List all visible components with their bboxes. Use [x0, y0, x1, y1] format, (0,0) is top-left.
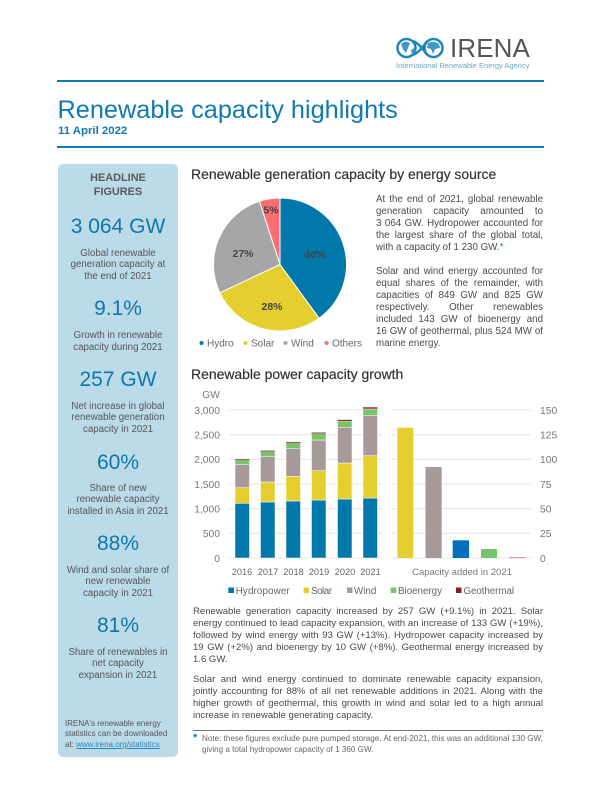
panel heading: FIGURES: [94, 186, 142, 198]
right axis labels: 50: [540, 504, 552, 516]
figure description: Share of new: [89, 483, 147, 494]
grid lines: [229, 410, 531, 558]
left axis labels: 2,500: [194, 430, 220, 442]
text block: generation capacity: [376, 194, 543, 349]
footnote text: [202, 734, 543, 754]
top rule: [57, 80, 544, 82]
right axis labels: 150: [540, 406, 557, 417]
footnote: [193, 732, 543, 754]
bar 2019: [312, 432, 326, 558]
right axis labels: 25: [540, 529, 552, 540]
agency name: International Renewable Energy Agency: [396, 61, 529, 70]
text block: capacity growth: Solar and wind energy continued to dominate renewable capacity expansion,: [193, 674, 543, 685]
figure description: generation capacity at: [71, 259, 165, 270]
bar 2016: [235, 459, 250, 558]
figure description: capacity during 2021: [73, 342, 163, 353]
figure: 257 GW: 257 GW: [79, 368, 157, 391]
year labels: [232, 567, 381, 577]
right axis labels: 75: [540, 480, 552, 491]
slice: wind: [214, 201, 280, 293]
pie legend: Others: [332, 338, 362, 350]
pie labels: 5%: [263, 204, 279, 216]
chart legend: Hydropower: [236, 586, 290, 597]
chart legend: Wind: [354, 586, 376, 597]
figure description: capacity in 2021: [83, 588, 153, 599]
text block: generation capacity: the largest share of the global total,: [376, 230, 543, 241]
text block: generation capacity: with a capacity of 1 230 GW.*: [376, 242, 503, 253]
text block: generation capacity: respectively. Other renewables: [376, 302, 543, 313]
bar 2018: [286, 442, 300, 558]
figure description: renewable capacity: [77, 494, 159, 505]
left axis labels: GW: [202, 390, 220, 401]
text block: capacity growth: followed by wind energy with 93 GW (+13%). Hydropower capacity increased by: [193, 630, 543, 641]
figure description: Global renewable: [80, 248, 156, 259]
figure description: [68, 647, 168, 681]
figure: 3 064 GW: 3 064 GW: [71, 215, 165, 238]
left axis labels: 1,000: [194, 504, 220, 516]
statistics note: statistics can be downloaded: [65, 729, 167, 738]
footnote marker: *: [193, 732, 197, 744]
stacked bars by year: [235, 407, 378, 558]
figure description: [71, 248, 166, 282]
left axis labels: 1,500: [194, 480, 220, 491]
text block: generation capacity: At the end of 2021, global renewable: [376, 194, 543, 205]
figure description: new renewable: [85, 576, 151, 587]
left axis labels: 0: [214, 554, 220, 565]
bar 2017: [260, 451, 275, 558]
figure: 60%: 60%: [97, 451, 139, 474]
text block: generation capacity: included 143 GW of bioenergy and: [376, 314, 543, 325]
text block: generation capacity: generation capacity amounted to: [376, 206, 543, 217]
year labels: 2021: [360, 567, 381, 577]
right axis labels: [540, 406, 557, 565]
figure description: Growth in renewable: [74, 330, 162, 341]
figure description: Net increase in global: [71, 401, 165, 412]
statistics note: [65, 719, 167, 749]
year labels: 2020: [335, 567, 355, 577]
statistics note: at: www.irena.org/statistics: [65, 740, 160, 749]
figure: 81%: 81%: [97, 614, 139, 637]
date: 11 April 2022: [58, 125, 127, 137]
bar 2020: [338, 420, 352, 558]
right axis labels: 125: [540, 430, 557, 442]
figure: 88%: 88%: [97, 532, 139, 555]
text block: generation capacity: Solar and wind energy accounted for: [376, 266, 543, 277]
text block: generation capacity: 3 064 GW. Hydropower accounted for: [376, 218, 543, 229]
pie legend: Solar: [251, 338, 275, 350]
text block: generation capacity: marine energy.: [376, 338, 440, 349]
figure description: [67, 565, 170, 599]
icon: infinity globes: [396, 38, 444, 58]
left axis labels: 2,000: [194, 455, 220, 466]
bars: capacity added in 2021: [397, 428, 525, 558]
pie legend: Wind: [291, 338, 314, 350]
left axis labels: [194, 390, 220, 565]
chart legend: Solar: [311, 586, 333, 597]
figure description: the end of 2021: [84, 271, 152, 282]
text block: capacity growth: energy continued to lead capacity expansion, with an increase of 133 GW (+19%),: [193, 618, 543, 629]
text block: generation capacity: 16 GW of geothermal, plus 524 MW of: [376, 326, 543, 337]
panel heading: [90, 172, 146, 198]
bar 2021: [363, 407, 378, 558]
slice: solar: [220, 264, 319, 331]
year labels: 2016: [232, 567, 252, 577]
text block: generation capacity: equal shares of the remainder, with: [376, 278, 543, 289]
header rule: [57, 146, 544, 148]
panel background: [58, 164, 178, 757]
slice: hydro: [280, 198, 347, 318]
footnote text: Note: these figures exclude pure pumped storage. At end-2021, this was an additional 130 GW,: [202, 734, 543, 743]
pie labels: [232, 204, 326, 313]
text block: capacity growth: higher growth of geothermal, this growth in wind and solar led to a high annual: [193, 698, 543, 709]
footnote text: giving a total hydropower capacity of 1 360 GW.: [202, 745, 373, 754]
chart legend: Bioenergy: [398, 586, 442, 597]
heading: generation capacity: Renewable generation capacity by energy source: [191, 166, 496, 182]
figure description: capacity in 2021: [83, 424, 153, 435]
text block: capacity growth: jointly accounting for 88% of all net renewable additions in 2021. Along with the: [193, 686, 543, 697]
text block: capacity growth: Renewable generation capacity increased by 257 GW (+9.1%) in 2021. Solar: [193, 606, 543, 617]
figure description: [73, 330, 163, 353]
year labels: 2017: [258, 567, 278, 577]
chart legend: Geothermal: [464, 586, 514, 597]
figure: 9.1%: 9.1%: [94, 297, 142, 320]
right chart label: Capacity added in 2021: [412, 567, 512, 578]
right axis labels: 0: [540, 554, 546, 565]
figure description: renewable generation: [71, 412, 165, 423]
text block: generation capacity: capacities of 849 GW and 825 GW: [376, 290, 543, 301]
figure description: Wind and solar share of: [67, 565, 169, 576]
pie legend: Hydro: [207, 338, 234, 350]
heading: capacity growth: Renewable power capacity growth: [191, 366, 403, 382]
year labels: 2018: [283, 567, 304, 577]
wordmark: IRENA: [450, 33, 530, 63]
slice: others: [259, 198, 280, 264]
text block: capacity growth: 1.6 GW.: [193, 654, 228, 665]
figure description: [67, 483, 169, 517]
pie labels: 27%: [232, 248, 254, 260]
figure description: Share of renewables in: [68, 647, 168, 658]
chart legend: [228, 586, 514, 597]
left axis labels: 500: [203, 529, 220, 540]
text block: capacity growth: [192, 606, 543, 721]
pie labels: 28%: [261, 301, 283, 313]
figure description: net capacity: [92, 658, 144, 669]
text block: capacity growth: increase in renewable generating capacity.: [193, 710, 373, 721]
footnote rule: [193, 730, 543, 731]
left axis labels: 3,000: [194, 406, 220, 417]
panel heading: HEADLINE: [90, 172, 146, 184]
figure description: installed in Asia in 2021: [67, 506, 169, 517]
year labels: 2019: [309, 567, 329, 577]
figure description: expansion in 2021: [79, 670, 157, 681]
figure description: [71, 401, 165, 435]
right axis labels: 100: [540, 455, 557, 466]
IRENA logo: [396, 33, 530, 70]
statistics note: IRENA's renewable energy: [65, 719, 161, 728]
text block: capacity growth: 19 GW (+2%) and bioenergy by 10 GW (+8%). Geothermal energy increased by: [193, 642, 543, 653]
title: Renewable capacity highlights: [58, 96, 398, 124]
pie labels: 40%: [304, 249, 326, 261]
